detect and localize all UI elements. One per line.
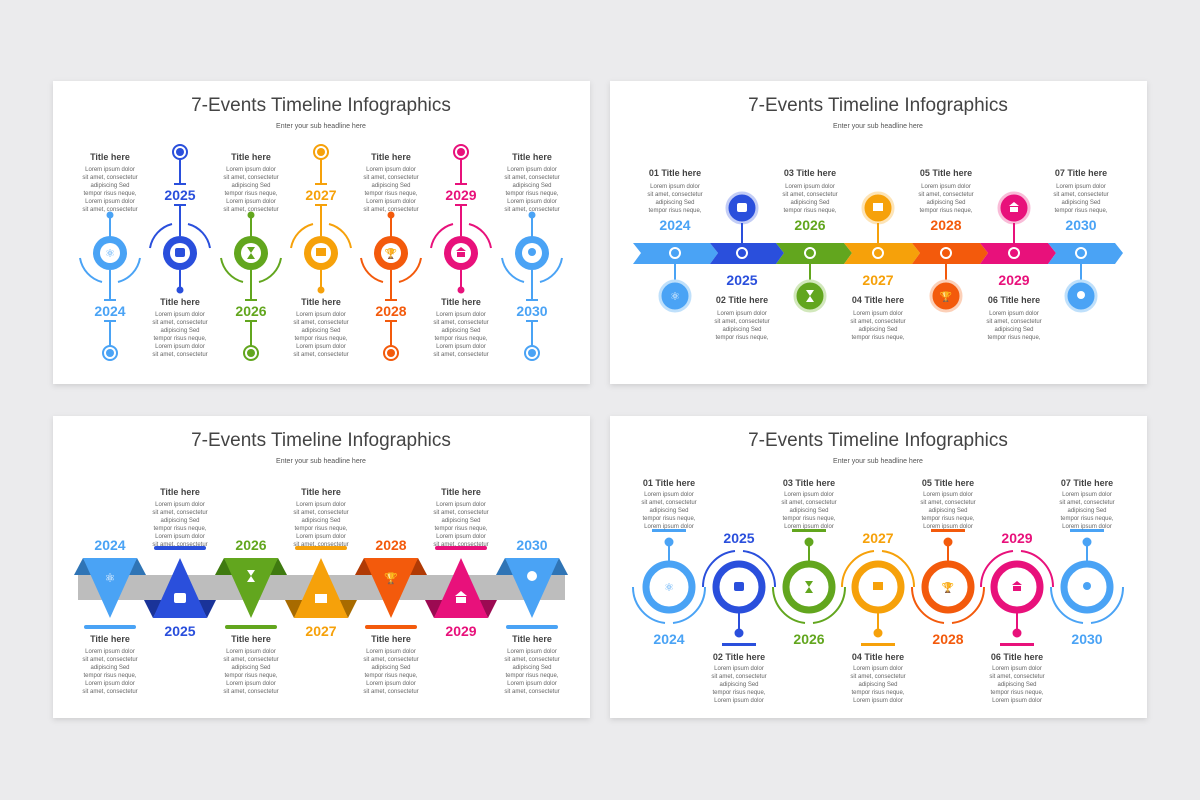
event 2028: 🏆	[385, 247, 398, 260]
event 2026	[221, 152, 281, 360]
events above-icon type (even): 02 Title here	[716, 295, 768, 305]
up triangles: Title here	[441, 487, 481, 497]
up triangles: 2029	[445, 623, 477, 639]
down triangles: Title here	[231, 634, 271, 644]
odd events (text above): 🏆	[942, 581, 955, 594]
events above-icon type (even): 2027	[862, 272, 894, 288]
events below-icon type (odd): 2030	[1065, 217, 1097, 233]
event 2025: Title here	[160, 297, 200, 307]
event 2025	[150, 145, 210, 358]
even events (text below): 2029	[1001, 530, 1033, 546]
event 2029: Title here	[441, 297, 481, 307]
odd events (text above): 2030	[1071, 631, 1103, 647]
events above-icon type (even): 04 Title here	[852, 295, 904, 305]
events below-icon type (odd): 07 Title here	[1055, 168, 1107, 178]
event 2026: 2026	[235, 303, 267, 319]
even events (text below): 06 Title here	[991, 652, 1043, 662]
events above-icon type (even): 06 Title here	[988, 295, 1040, 305]
title: 7-Events Timeline Infographics	[748, 95, 1008, 116]
down triangles: 🏆	[384, 572, 398, 585]
events above-icon type (even): 2029	[998, 272, 1030, 288]
down triangles: ⚛	[105, 571, 115, 585]
gray band	[78, 575, 565, 600]
events below-icon type (odd): 2024	[659, 217, 691, 233]
up triangles: Title here	[301, 487, 341, 497]
events below-icon type (odd): 05 Title here	[920, 168, 972, 178]
event 2026: Title here	[231, 152, 271, 162]
event 2027	[291, 145, 351, 358]
panel: bottom-left triangle timeline	[53, 416, 590, 718]
odd events (text above)	[633, 478, 1123, 647]
subtitle: Enter your sub headline here	[833, 123, 923, 130]
title: 7-Events Timeline Infographics	[191, 95, 451, 116]
subtitle: Enter your sub headline here	[276, 123, 366, 130]
event 2029: 2029	[445, 187, 477, 203]
even events (text below)	[703, 530, 1053, 704]
events below-icon type (odd): 01 Title here	[649, 168, 701, 178]
up triangles: 2027	[305, 623, 337, 639]
down triangles: 2026	[235, 537, 267, 553]
even events (text below): 2027	[862, 530, 894, 546]
events above-icon type (even)	[714, 193, 1042, 341]
panel: top-left timeline	[53, 81, 590, 384]
panel: bottom-right circle wave timeline	[610, 416, 1147, 718]
up triangles: Title here	[160, 487, 200, 497]
up triangles	[144, 487, 497, 639]
events above-icon type (even): 2025	[726, 272, 758, 288]
subtitle: Enter your sub headline here	[276, 458, 366, 465]
events below-icon type (odd): 🏆	[940, 290, 953, 303]
event 2029	[431, 145, 491, 358]
events below-icon type (odd): 2026	[794, 217, 826, 233]
subtitle: Enter your sub headline here	[833, 458, 923, 465]
down triangles: 2024	[94, 537, 126, 553]
odd events (text above): ⚛	[664, 582, 674, 594]
event 2025: 2025	[164, 187, 196, 203]
event 2027: 2027	[305, 187, 337, 203]
events below-icon type (odd): 2028	[930, 217, 962, 233]
event 2027: Title here	[301, 297, 341, 307]
ribbon	[633, 243, 1123, 264]
odd events (text above): 2028	[932, 631, 964, 647]
event 2024: ⚛	[105, 248, 115, 260]
event 2030: 2030	[516, 303, 548, 319]
event 2030: Title here	[512, 152, 552, 162]
odd events (text above): 05 Title here	[922, 478, 974, 488]
even events (text below): 02 Title here	[713, 652, 765, 662]
event 2028: Title here	[371, 152, 411, 162]
down triangles: Title here	[90, 634, 130, 644]
odd events (text above): 2026	[793, 631, 825, 647]
event 2028: 2028	[375, 303, 407, 319]
events below-icon type (odd): ⚛	[670, 291, 680, 303]
up triangles: 2025	[164, 623, 196, 639]
event 2024	[80, 152, 140, 360]
event 2028	[361, 152, 421, 360]
even events (text below): 04 Title here	[852, 652, 904, 662]
down triangles	[74, 537, 568, 695]
events below-icon type (odd)	[647, 168, 1109, 311]
odd events (text above): 03 Title here	[783, 478, 835, 488]
event 2024: Title here	[90, 152, 130, 162]
events below-icon type (odd): 03 Title here	[784, 168, 836, 178]
odd events (text above): 07 Title here	[1061, 478, 1113, 488]
even events (text below): 2025	[723, 530, 755, 546]
odd events (text above): 01 Title here	[643, 478, 695, 488]
down triangles: 2030	[516, 537, 548, 553]
down triangles: Title here	[512, 634, 552, 644]
down triangles: Title here	[371, 634, 411, 644]
panel: top-right ribbon timeline	[610, 81, 1147, 384]
title: 7-Events Timeline Infographics	[748, 430, 1008, 451]
title: 7-Events Timeline Infographics	[191, 430, 451, 451]
down triangles: 2028	[375, 537, 407, 553]
odd events (text above): 2024	[653, 631, 685, 647]
event 2030	[502, 152, 562, 360]
event 2024: 2024	[94, 303, 126, 319]
